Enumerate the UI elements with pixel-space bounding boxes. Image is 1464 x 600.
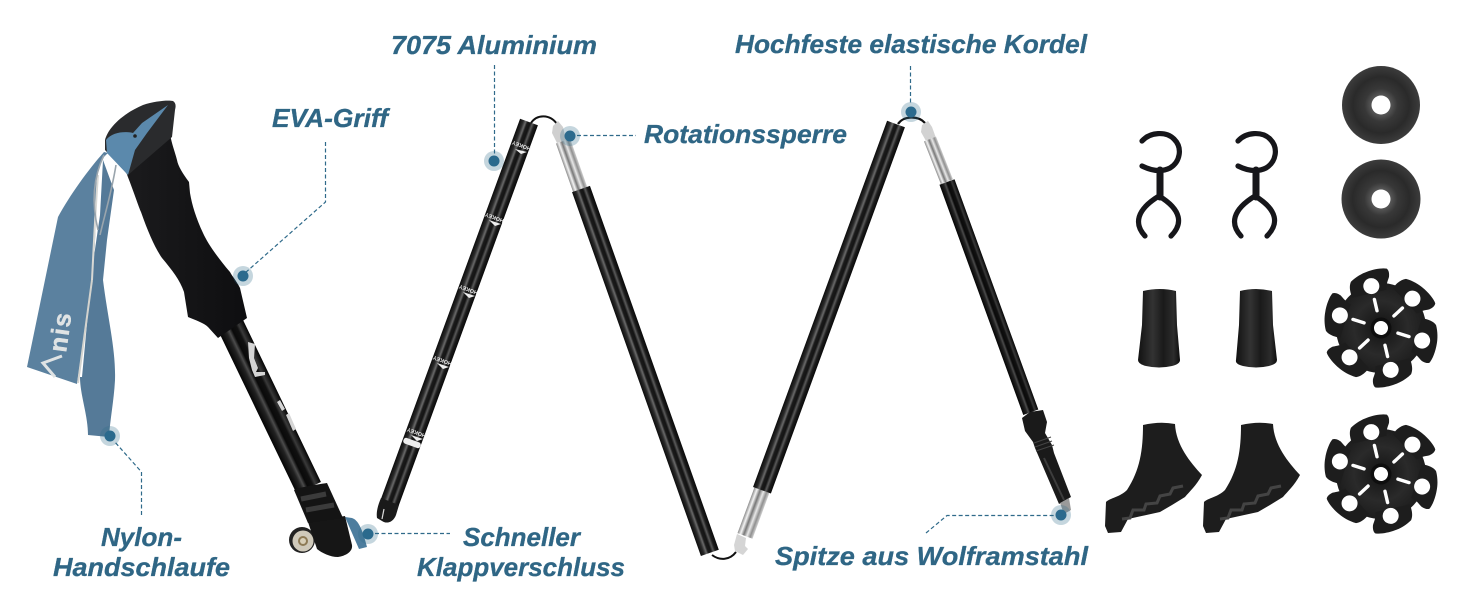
- callout: Schneller Klappverschluss: [358, 522, 625, 582]
- logos on section 2: HOKEY: [511, 139, 532, 151]
- accessory: straight rubber cap right: [1236, 289, 1277, 368]
- callout: Schneller Klappverschluss: Klappverschluss: [417, 552, 625, 582]
- logos on section 2: HOKEY: [484, 211, 505, 223]
- callout: Nylon-Handschlaufe: Nylon-: [101, 522, 182, 552]
- callout: Nylon-Handschlaufe: Handschlaufe: [53, 552, 230, 582]
- folding lock base: [289, 483, 367, 557]
- accessory: angled rubber paw right: [1203, 423, 1300, 533]
- accessory: trekking basket top: [1308, 257, 1454, 399]
- callout: Hochfeste elastische Kordel: [735, 29, 1088, 122]
- pole section 1: strap, grip and shaft: [27, 101, 367, 557]
- accessory: trekking basket bottom: [1308, 403, 1454, 545]
- callout: Spitze aus Wolframstahl: Spitze aus Wolframstahl: [775, 541, 1089, 571]
- wrist strap: nis: [44, 310, 78, 354]
- logos on section 2: HOKEY: [458, 283, 479, 295]
- accessory: angled rubber paw left: [1105, 423, 1202, 533]
- shaft: [217, 316, 321, 494]
- callout: Spitze aus Wolframstahl: [775, 505, 1089, 571]
- callout: EVA-Griff: EVA-Griff: [272, 103, 390, 133]
- pole section 4: [712, 121, 905, 559]
- pole section 3: [531, 116, 719, 556]
- logos on section 2: [403, 139, 532, 449]
- callout: 7075 Aluminium: 7075 Aluminium: [391, 30, 597, 60]
- callout: 7075 Aluminium: [391, 30, 597, 171]
- accessory: clip left: [1139, 134, 1179, 236]
- callout: Rotationssperre: Rotationssperre: [644, 119, 847, 149]
- callout: Schneller Klappverschluss: Schneller: [463, 522, 582, 552]
- pole section 5 with tip: [898, 117, 1071, 514]
- pole section 2: [377, 119, 538, 523]
- accessory: rubber disc bottom: [1342, 160, 1420, 238]
- accessory: straight rubber cap left: [1138, 289, 1180, 368]
- callout: Nylon-Handschlaufe: [53, 426, 230, 582]
- EVA grip: [105, 101, 247, 338]
- callout: Rotationssperre: [560, 119, 847, 149]
- wrist strap: [27, 152, 116, 437]
- accessory: rubber disc top: [1342, 66, 1420, 144]
- callout: EVA-Griff: [233, 103, 390, 286]
- logos on section 2: HOKEY: [432, 354, 453, 366]
- logos on section 2: HOKEY: [406, 426, 427, 438]
- callout: Hochfeste elastische Kordel: Hochfeste elastische Kordel: [735, 29, 1088, 59]
- accessory: clip right: [1235, 134, 1275, 236]
